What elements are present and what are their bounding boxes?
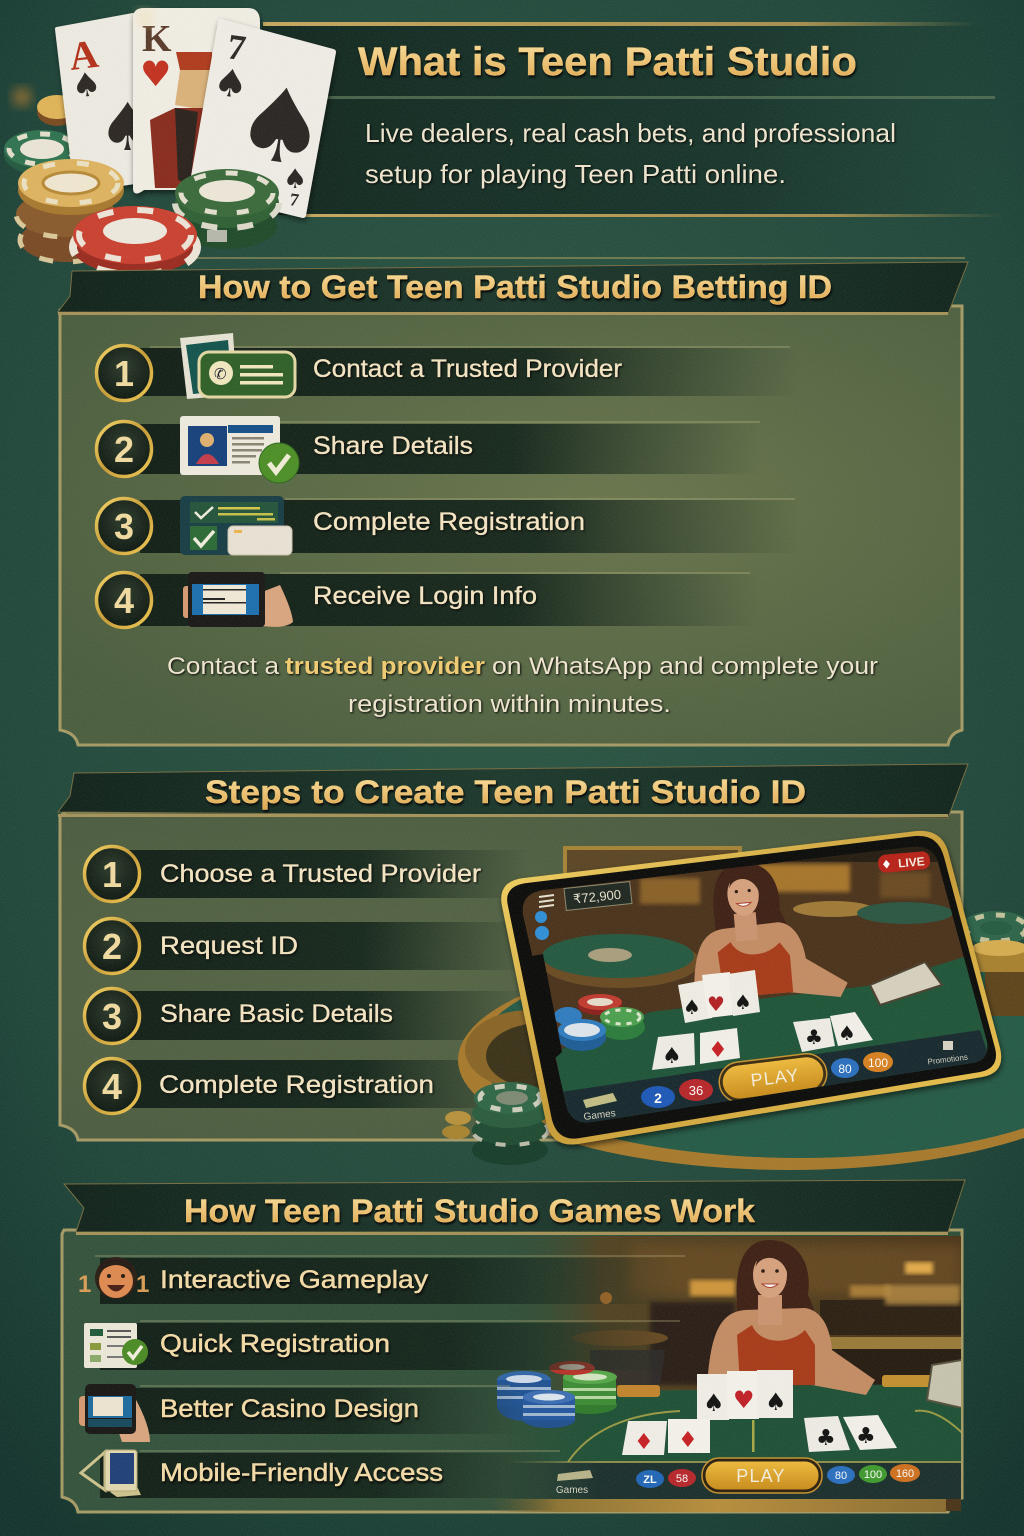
phone with live game xyxy=(500,831,1001,1145)
playing cards and chips illustration: A xyxy=(67,31,101,79)
decorative glows xyxy=(13,10,153,106)
row: interactive gameplay xyxy=(78,1255,685,1304)
step 2: request id: 2 xyxy=(102,926,122,967)
panel: create id steps xyxy=(60,812,962,1140)
bottom gold rail xyxy=(490,1499,946,1512)
play button: PLAY xyxy=(750,1065,800,1091)
dealer xyxy=(694,865,848,997)
play button: PLAY xyxy=(736,1466,786,1486)
section 1: how to get betting id xyxy=(58,262,968,745)
heading banner: how games work xyxy=(64,1180,965,1235)
lower right cards xyxy=(804,1415,897,1452)
step 1: choose a trusted provider: 1 xyxy=(102,854,122,895)
step 3: share basic details xyxy=(84,988,530,1044)
play button xyxy=(718,1053,828,1101)
promotions label: Promotions xyxy=(927,1053,968,1066)
playing cards and chips illustration: ♠ xyxy=(211,59,251,108)
step 4: receive login info xyxy=(96,572,760,628)
casino table behind phone xyxy=(442,848,1024,1170)
playing cards and chips illustration: K xyxy=(142,18,172,60)
bottom bar xyxy=(564,1030,987,1122)
playing cards and chips illustration: ♠ xyxy=(283,164,307,195)
heading banner: how to get id: How to Get Teen Patti Studio Betting ID xyxy=(198,269,832,305)
live badge xyxy=(877,851,931,873)
step 4: complete registration: 4 xyxy=(102,1066,122,1107)
panel: betting id steps xyxy=(60,306,962,745)
section 3: how games work xyxy=(62,1180,1005,1512)
center cards: ♠ xyxy=(703,1389,725,1417)
bet chips: 80 xyxy=(838,1062,852,1076)
step 1: choose a trusted provider xyxy=(84,846,530,902)
lower right cards: ♣ xyxy=(816,1426,836,1451)
play button xyxy=(702,1458,822,1493)
step 4: complete registration: Complete Registration xyxy=(159,1071,434,1099)
bet chips: 80 xyxy=(835,1470,847,1482)
bet chips: 100 xyxy=(868,1056,888,1070)
step 4: receive login info: Receive Login Info xyxy=(313,582,537,610)
live badge: LIVE xyxy=(897,854,925,870)
playing cards and chips illustration: ♠ xyxy=(98,89,157,166)
intro text: Live dealers, real cash bets, and professional xyxy=(365,118,896,148)
playing cards and chips illustration: ♠ xyxy=(69,64,103,106)
games label: Games xyxy=(583,1108,616,1123)
chip stacks xyxy=(497,1361,617,1428)
heading banner: steps to create id xyxy=(58,764,968,818)
balance box: ₹72,900 xyxy=(572,887,622,907)
center cards: ♥ xyxy=(733,1386,755,1414)
row: better casino design: Better Casino Design xyxy=(160,1395,419,1423)
playing cards and chips illustration: 7 xyxy=(225,26,248,68)
step 2: request id xyxy=(84,918,530,974)
phone side notch xyxy=(532,954,562,1060)
step 4: receive login info: 4 xyxy=(114,580,134,621)
room and table background xyxy=(500,1236,962,1511)
bet chips: 160 xyxy=(896,1468,914,1480)
games label xyxy=(583,1093,617,1123)
trays xyxy=(617,1375,933,1397)
heading banner: how to get id xyxy=(58,262,968,315)
step 2: share details: 2 xyxy=(114,429,134,470)
center cards xyxy=(697,1370,793,1420)
games label: Games xyxy=(556,1485,588,1496)
note text xyxy=(167,653,878,718)
bet chips: 36 xyxy=(689,1083,703,1098)
card box xyxy=(927,1360,962,1408)
bet chips: 2 xyxy=(654,1090,662,1106)
intro text xyxy=(365,118,896,189)
center cards: ♠ xyxy=(765,1388,787,1416)
dealer xyxy=(708,1240,875,1395)
title: What is Teen Patti Studio xyxy=(358,40,857,84)
row: interactive gameplay: 1 xyxy=(78,1271,91,1298)
promotions label xyxy=(927,1041,968,1066)
note text: trusted provider xyxy=(285,653,485,680)
menu icon xyxy=(539,895,554,907)
row: mobile-friendly access: Mobile-Friendly Access xyxy=(160,1459,443,1487)
step 4: complete registration xyxy=(84,1058,530,1114)
lower right cards: ♣ xyxy=(856,1424,876,1449)
row: quick registration: Quick Registration xyxy=(160,1330,390,1358)
step 3: share basic details: Share Basic Details xyxy=(160,1000,393,1028)
shoe xyxy=(870,962,942,1005)
left cards: ♦ xyxy=(708,1038,728,1063)
bet chips: 100 xyxy=(864,1469,882,1481)
row: better casino design xyxy=(79,1384,520,1442)
center cards xyxy=(678,970,760,1023)
games label xyxy=(556,1470,593,1496)
phone screen xyxy=(522,846,988,1122)
bet chips: 58 xyxy=(676,1473,688,1485)
heading banner: steps to create id: Steps to Create Teen Patti Studio ID xyxy=(205,774,806,810)
playing cards and chips illustration: ♥ xyxy=(140,55,171,95)
left cards: ♠ xyxy=(662,1044,682,1069)
step 3: complete registration xyxy=(96,496,800,555)
center cards: ♥ xyxy=(707,992,725,1016)
step 1: contact a trusted provider: Contact a Trusted Provider xyxy=(313,355,622,383)
right cards xyxy=(793,1012,873,1052)
heading banner: how games work: How Teen Patti Studio Games Work xyxy=(184,1193,755,1229)
step 2: request id: Request ID xyxy=(160,932,298,960)
balance box xyxy=(564,882,632,910)
intro panel xyxy=(195,22,1005,259)
section 2: steps to create id xyxy=(58,764,968,1140)
bet chips xyxy=(641,1052,893,1108)
left cards xyxy=(652,1028,740,1070)
playing cards and chips illustration: ♠ xyxy=(228,62,335,192)
step 2: share details: Share Details xyxy=(313,432,473,460)
intro text: setup for playing Teen Patti online. xyxy=(365,159,786,189)
step 3: complete registration: 3 xyxy=(114,506,134,547)
bet chips xyxy=(636,1464,920,1488)
lower left cards xyxy=(622,1419,710,1455)
note text: registration within minutes. xyxy=(348,691,671,718)
row: mobile-friendly access xyxy=(81,1450,560,1498)
center cards: ♠ xyxy=(734,990,752,1014)
step 1: contact a trusted provider: 1 xyxy=(114,353,134,394)
dealer scene xyxy=(497,1236,1005,1511)
step 3: complete registration: Complete Registration xyxy=(313,508,585,536)
step 1: choose a trusted provider: Choose a Trusted Provider xyxy=(160,860,481,888)
bet chips: ZL xyxy=(643,1474,657,1486)
row: interactive gameplay: Interactive Gameplay xyxy=(160,1266,429,1294)
panel: how games work xyxy=(62,1230,962,1512)
step 3: share basic details: 3 xyxy=(102,996,122,1037)
row: quick registration xyxy=(84,1320,680,1370)
right cards: ♠ xyxy=(838,1021,856,1045)
note text: on WhatsApp and complete your xyxy=(492,653,878,680)
note text: Contact a xyxy=(167,653,279,680)
right cards: ♣ xyxy=(805,1025,823,1049)
playing cards and chips illustration xyxy=(4,8,335,275)
step 1: contact a trusted provider: ✆ xyxy=(214,365,227,383)
row: interactive gameplay: 1 xyxy=(136,1271,149,1298)
chip stacks xyxy=(554,994,645,1051)
lower left cards: ♦ xyxy=(634,1430,654,1455)
step 1: contact a trusted provider xyxy=(96,333,800,400)
live badge: ♦ xyxy=(881,857,893,872)
playing cards and chips illustration: 7 xyxy=(288,189,300,210)
lower left cards: ♦ xyxy=(678,1428,698,1453)
step 2: share details xyxy=(96,416,760,483)
blue icons xyxy=(535,911,549,940)
center cards: ♠ xyxy=(683,995,701,1019)
